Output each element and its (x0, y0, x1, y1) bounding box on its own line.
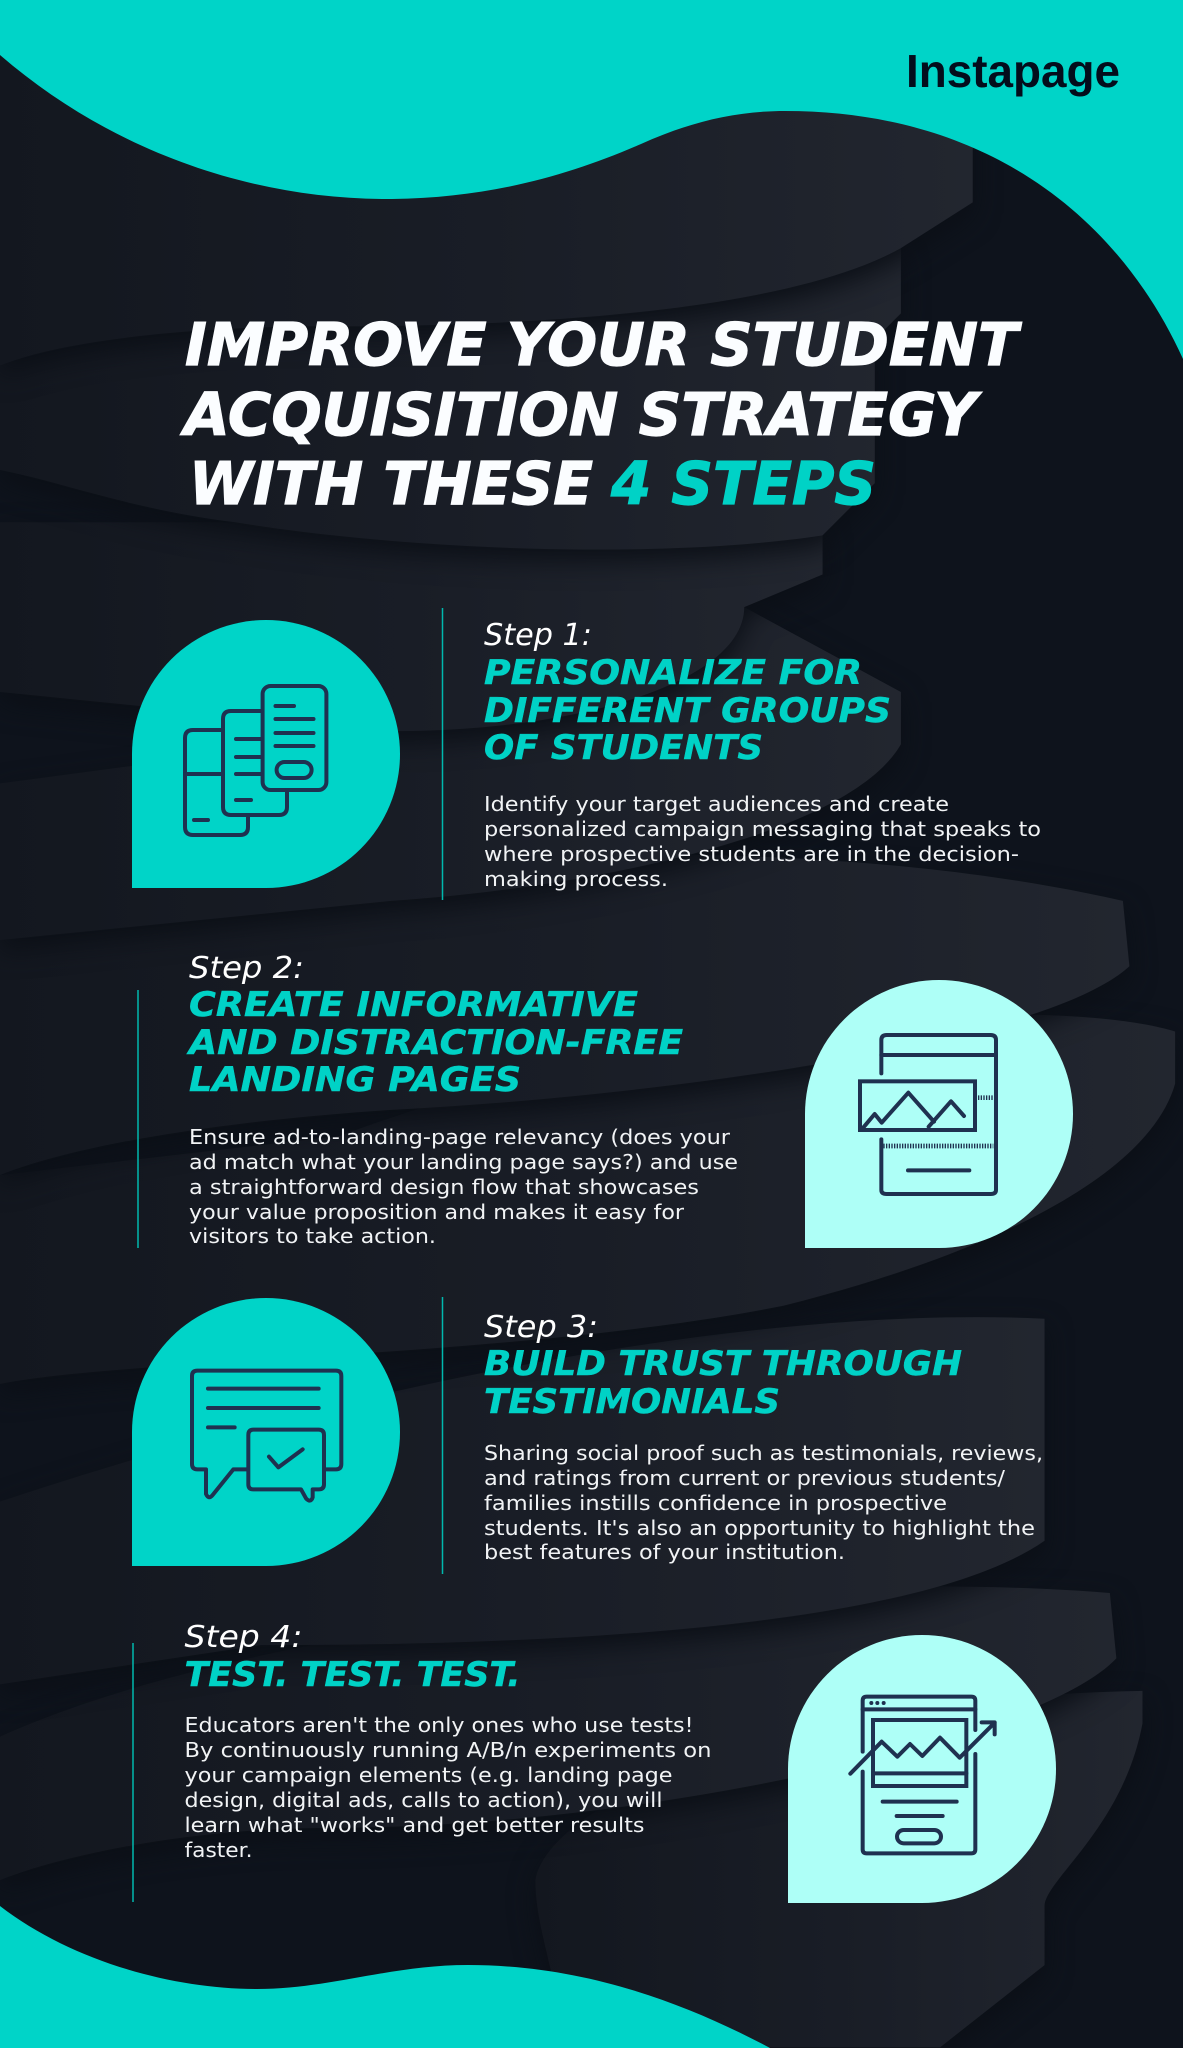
icon: chat bubbles with check (132, 1298, 400, 1566)
step body: Educators aren't the only ones who use tests! (184, 1713, 694, 1737)
divider (137, 990, 139, 1248)
icon: stacked documents (132, 620, 400, 888)
step body: faster. (184, 1838, 252, 1862)
panel: step 3 (132, 1297, 1043, 1574)
step body: Sharing social proof such as testimonials, reviews, (484, 1441, 1043, 1465)
step body (184, 1713, 712, 1862)
step body (189, 1125, 738, 1248)
title (180, 310, 1023, 518)
step body: personalized campaign messaging that speaks to (484, 817, 1041, 841)
step label: Step 4: (184, 1620, 302, 1655)
step body (484, 1441, 1043, 1564)
step body: Identify your target audiences and create (484, 792, 949, 816)
bottom teal wave (0, 1906, 770, 2048)
step label: Step 3: (484, 1310, 598, 1345)
step heading: TESTIMONIALS (484, 1382, 780, 1422)
title: WITH THESE (189, 449, 593, 518)
panel: step 1 (132, 608, 1041, 900)
icon: landing page with image (805, 980, 1073, 1248)
step heading: PERSONALIZE FOR (484, 653, 862, 693)
step body: a straightforward design flow that showcases (189, 1175, 699, 1199)
step heading: OF STUDENTS (484, 728, 763, 768)
panel: step 2 (138, 951, 1073, 1248)
step body: By continuously running A/B/n experiments on (184, 1738, 712, 1762)
step body: best features of your institution. (484, 1540, 845, 1564)
title: IMPROVE YOUR STUDENT (185, 310, 1023, 379)
step body: students. It's also an opportunity to highlight the (484, 1516, 1035, 1540)
step heading (484, 1344, 962, 1422)
step body: design, digital ads, calls to action), you will (184, 1788, 662, 1812)
step label: Step 1: (484, 618, 592, 653)
logo: Instapage: Instapage (906, 45, 1120, 97)
step label: Step 2: (189, 951, 304, 986)
step body: where prospective students are in the decision- (484, 842, 1019, 866)
step heading: CREATE INFORMATIVE (189, 985, 638, 1025)
divider (442, 1297, 444, 1574)
step heading: BUILD TRUST THROUGH (484, 1344, 962, 1384)
step body: visitors to take action. (189, 1224, 436, 1248)
step heading: LANDING PAGES (189, 1060, 521, 1100)
title: ACQUISITION STRATEGY (180, 380, 982, 449)
divider (442, 608, 444, 900)
step heading: DIFFERENT GROUPS (484, 691, 891, 731)
panel: step 4 (133, 1620, 1056, 1903)
step body (484, 792, 1041, 891)
step body: learn what "works" and get better results (184, 1813, 644, 1837)
step body: your value proposition and makes it easy for (189, 1200, 685, 1224)
step body: families instills confidence in prospective (484, 1491, 947, 1515)
step heading (484, 653, 891, 768)
title: 4 STEPS (610, 449, 876, 518)
step heading (186, 985, 683, 1100)
step body: ad match what your landing page says?) and use (189, 1150, 738, 1174)
step body: your campaign elements (e.g. landing page (184, 1763, 672, 1787)
icon: test results page (788, 1635, 1056, 1903)
step body: Ensure ad-to-landing-page relevancy (does your (189, 1125, 731, 1149)
step heading: AND DISTRACTION-FREE (186, 1023, 683, 1063)
step body: and ratings from current or previous students/ (484, 1466, 1005, 1490)
step heading: TEST. TEST. TEST. (184, 1655, 520, 1695)
top teal wave (0, 0, 1183, 359)
divider (132, 1643, 134, 1902)
step body: making process. (484, 867, 668, 891)
